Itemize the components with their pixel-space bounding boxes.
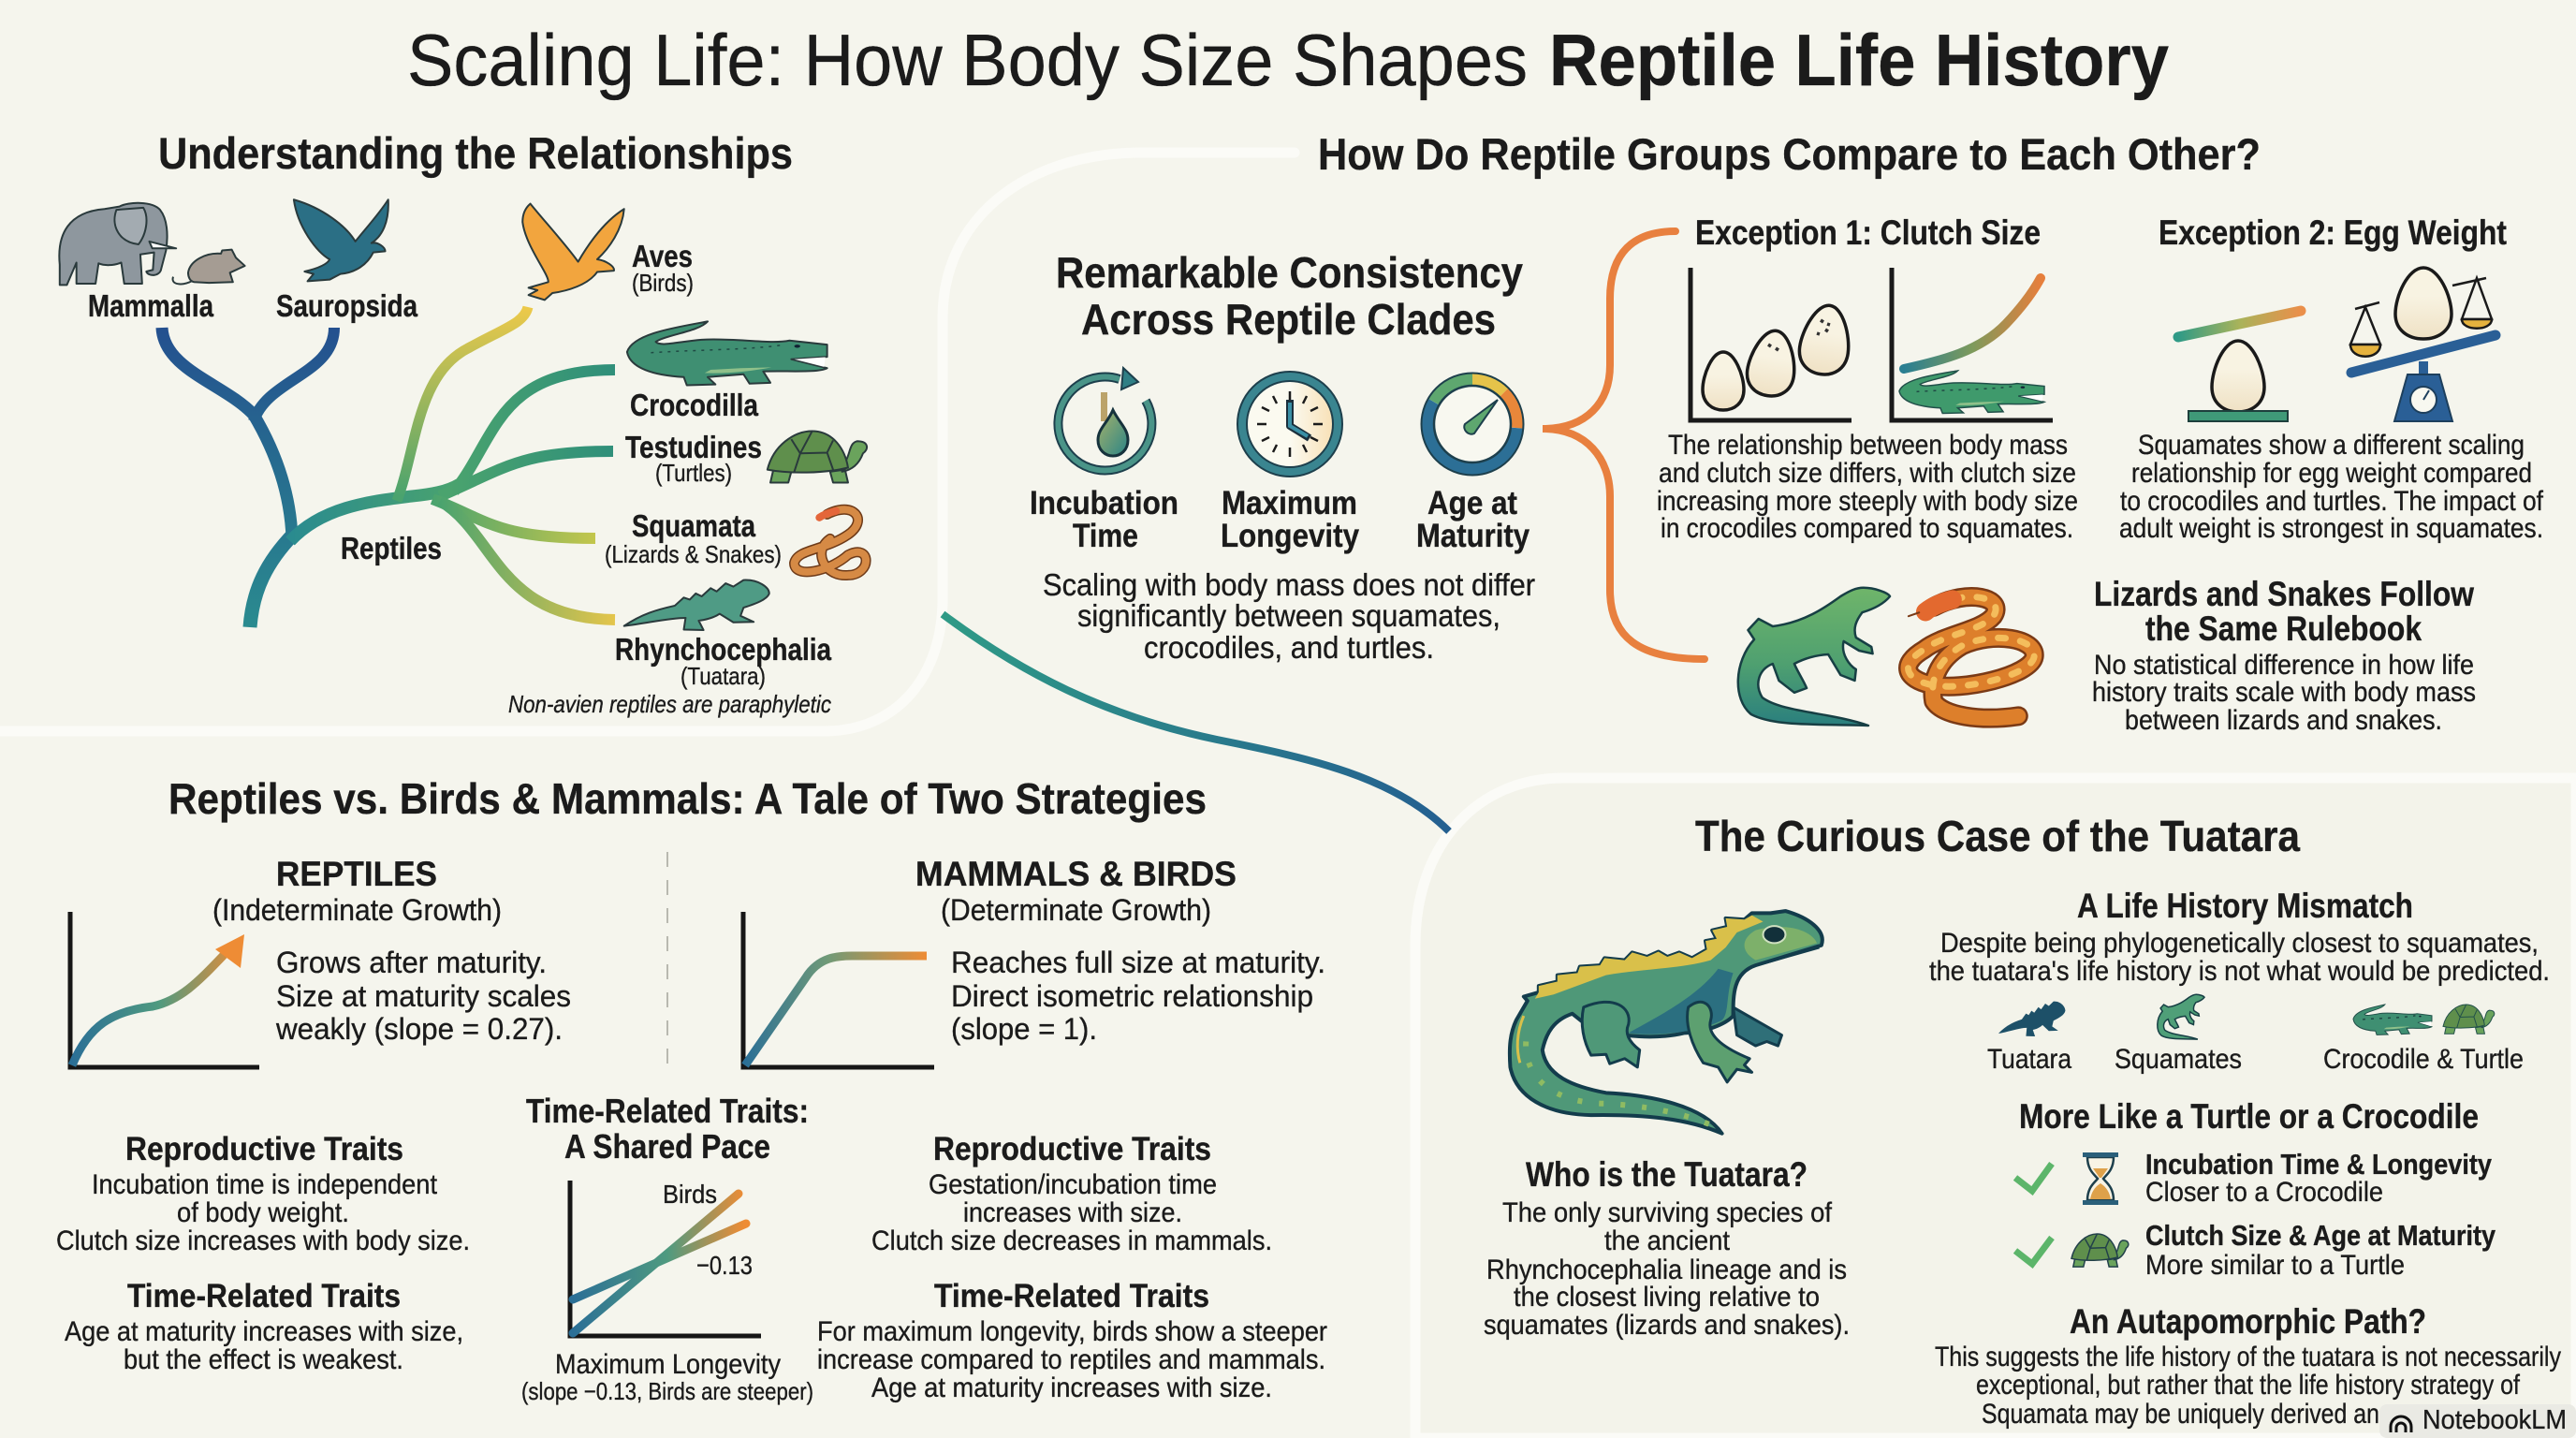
tree labels: (Tuatara) xyxy=(681,662,766,690)
chart: maximum longevity: (slope −0.13, Birds are steeper) xyxy=(521,1377,813,1405)
icon: crocodile xyxy=(627,321,827,385)
icon: egg on stand xyxy=(2178,311,2301,421)
text: Closer to a Crocodile xyxy=(2145,1177,2383,1208)
icon: clock xyxy=(1237,372,1342,477)
text block: life history mismatch xyxy=(1929,887,2550,987)
mammals and birds text: Direct isometric relationship xyxy=(951,979,1313,1013)
right traits xyxy=(817,1131,1327,1403)
tree labels: Sauropsida xyxy=(276,288,418,323)
icon labels: Crocodile & Turtle xyxy=(2323,1044,2524,1075)
subheading: more like a turtle or crocodile: More Like a Turtle or a Crocodile xyxy=(2019,1097,2479,1136)
mammals and birds text: Reaches full size at maturity. xyxy=(951,946,1325,979)
panel: reptiles vs birds and mammals xyxy=(56,774,1327,1405)
right traits: increases with size. xyxy=(963,1197,1182,1228)
divider xyxy=(666,852,668,1065)
head markings xyxy=(1745,927,1817,961)
icon labels: Age at xyxy=(1427,485,1517,521)
heading: Understanding the Relationships xyxy=(158,128,793,178)
right traits: increase compared to reptiles and mammals. xyxy=(817,1344,1325,1375)
heading: Reptiles vs. Birds & Mammals: A Tale of Two Strategies xyxy=(168,774,1207,823)
text block: who is the tuatara: the closest living relative to xyxy=(1514,1282,1820,1313)
text: Incubation Time & Longevity xyxy=(2145,1148,2493,1181)
text: The relationship between body mass xyxy=(1668,430,2068,461)
left traits xyxy=(56,1131,470,1375)
text xyxy=(2092,650,2476,736)
text block: who is the tuatara: squamates (lizards and snakes). xyxy=(1484,1310,1850,1341)
text: increasing more steeply with body size xyxy=(1657,486,2078,517)
right traits: Reproductive Traits xyxy=(933,1131,1211,1167)
text: history traits scale with body mass xyxy=(2092,677,2476,708)
connector curve xyxy=(943,614,1449,831)
text xyxy=(1657,430,2078,544)
panel: curious case of the tuatara xyxy=(1484,812,2576,1438)
right traits: Time-Related Traits xyxy=(934,1278,1209,1314)
subheading: shared pace: A Shared Pace xyxy=(564,1127,770,1166)
far front leg xyxy=(1734,1007,1781,1046)
text xyxy=(2119,430,2544,544)
exception 1: clutch size xyxy=(1657,213,2078,544)
panel outline: relationships xyxy=(0,153,1295,731)
text block: scaling: Scaling with body mass does not differ xyxy=(1043,567,1535,602)
text: Squamates show a different scaling xyxy=(2138,430,2525,461)
mammals and birds text: (slope = 1). xyxy=(951,1012,1097,1046)
chart: eggs xyxy=(1690,268,1854,420)
icon: lizard xyxy=(1738,588,1890,726)
text: and clutch size differs, with clutch size xyxy=(1659,458,2076,489)
icon: turtle xyxy=(2071,1234,2129,1267)
tree labels: Non-avien reptiles are paraphyletic xyxy=(508,690,831,718)
icon: small squamate xyxy=(2158,994,2204,1039)
panel: understanding the relationships xyxy=(59,128,867,718)
chart: maximum longevity xyxy=(521,1180,813,1405)
tree labels: (Lizards & Snakes) xyxy=(605,540,782,568)
text block: scaling: crocodiles, and turtles. xyxy=(1144,630,1434,665)
icon labels: Tuatara xyxy=(1987,1044,2071,1075)
heading: The Curious Case of the Tuatara xyxy=(1695,812,2300,860)
subheading: remarkable consistency xyxy=(1056,248,1523,344)
front leg xyxy=(1688,1002,1752,1082)
chart: maximum longevity: Birds xyxy=(663,1180,717,1209)
icon: tuatara xyxy=(624,580,769,630)
text: between lizards and snakes. xyxy=(2125,705,2442,736)
tree labels xyxy=(88,239,832,718)
row: clutch and maturity xyxy=(2015,1219,2496,1281)
left traits: of body weight. xyxy=(177,1197,349,1228)
reptiles text: Grows after maturity. xyxy=(276,946,547,979)
title: Scaling Life: How Body Size Shapes xyxy=(407,19,1528,101)
reptiles heading: (Indeterminate Growth) xyxy=(212,893,502,927)
watermark: NotebookLM: NotebookLM xyxy=(2422,1405,2567,1435)
text block: who is the tuatara: The only surviving species of xyxy=(1502,1197,1833,1228)
heading: the Same Rulebook xyxy=(2145,609,2422,648)
reptiles text: weakly (slope = 0.27). xyxy=(275,1012,563,1046)
tree labels: (Birds) xyxy=(632,269,694,297)
tree labels: Crocodilla xyxy=(630,388,759,422)
text block: autapomorphic path: An Autapomorphic Path? xyxy=(2070,1302,2426,1341)
icon: check mark xyxy=(2015,1238,2052,1264)
text xyxy=(2145,1148,2493,1208)
text: No statistical difference in how life xyxy=(2094,650,2474,681)
icon labels xyxy=(1030,485,1530,554)
icon row: comparison xyxy=(1987,994,2524,1075)
left traits: Reproductive Traits xyxy=(125,1131,403,1167)
title xyxy=(407,19,2169,101)
text: in crocodiles compared to squamates. xyxy=(1661,513,2073,544)
right traits: Clutch size decreases in mammals. xyxy=(871,1225,1272,1256)
text block: autapomorphic path xyxy=(1935,1302,2561,1430)
tree icons xyxy=(59,199,867,630)
mammals and birds heading: MAMMALS & BIRDS xyxy=(915,855,1237,893)
text block: scaling xyxy=(1043,567,1535,665)
left traits: Clutch size increases with body size. xyxy=(56,1225,470,1256)
text block: autapomorphic path: Squamata may be uniquely derived an xyxy=(1982,1399,2379,1430)
tree labels: Reptiles xyxy=(341,531,442,565)
tree labels: Squamata xyxy=(632,508,756,543)
icon: check mark xyxy=(2015,1164,2052,1191)
text xyxy=(2145,1219,2496,1281)
subheading: shared pace xyxy=(526,1092,809,1166)
reptiles text xyxy=(275,946,571,1046)
row: incubation and longevity xyxy=(2015,1148,2493,1208)
icon labels: Incubation xyxy=(1030,485,1178,521)
left traits: but the effect is weakest. xyxy=(124,1344,403,1375)
icon labels: Squamates xyxy=(2115,1044,2242,1075)
text block: who is the tuatara xyxy=(1484,1155,1850,1341)
chart: crocodile curve xyxy=(1892,268,2053,420)
tail bands xyxy=(1526,1041,1711,1125)
text: Clutch Size & Age at Maturity xyxy=(2145,1219,2496,1252)
mammals and birds heading xyxy=(915,855,1237,927)
icon labels: Time xyxy=(1073,518,1138,554)
text block: who is the tuatara: the ancient xyxy=(1604,1225,1731,1256)
title: Reptile Life History xyxy=(1549,19,2169,101)
throat and belly xyxy=(1629,969,1734,1034)
left traits: Age at maturity increases with size, xyxy=(65,1316,463,1347)
text block: who is the tuatara: Who is the Tuatara? xyxy=(1526,1155,1808,1194)
text block: scaling: significantly between squamates, xyxy=(1077,598,1500,633)
icon labels xyxy=(1987,1044,2524,1075)
chart: indeterminate growth xyxy=(70,912,259,1067)
icon labels: Maturity xyxy=(1416,518,1530,554)
icon: snake xyxy=(795,509,866,576)
hind leg xyxy=(1582,1002,1640,1067)
icon: small crocodile xyxy=(2353,1005,2432,1034)
panel: tuatara background xyxy=(1415,778,2576,1438)
icon: mouse xyxy=(173,250,245,284)
heading: Lizards and Snakes Follow xyxy=(2094,575,2474,613)
heading xyxy=(2094,575,2474,648)
subheading: shared pace: Time-Related Traits: xyxy=(526,1092,809,1130)
text block: who is the tuatara: Rhynchocephalia lineage and is xyxy=(1486,1255,1847,1285)
tree labels: Mammalla xyxy=(88,288,214,323)
chart: maximum longevity: −0.13 xyxy=(696,1251,753,1280)
phylogenetic tree xyxy=(162,307,615,627)
icon: gauge xyxy=(1421,373,1524,476)
right traits: Gestation/incubation time xyxy=(929,1169,1217,1200)
icon: small tuatara xyxy=(1998,1002,2065,1036)
heading: Exception 2: Egg Weight xyxy=(2159,213,2507,252)
panel: how do reptile groups compare xyxy=(1030,129,2544,736)
tree labels: Aves xyxy=(632,239,693,273)
right traits: Age at maturity increases with size. xyxy=(871,1372,1272,1403)
heading: How Do Reptile Groups Compare to Each Other? xyxy=(1318,129,2261,179)
tree labels: Testudines xyxy=(625,430,762,464)
chart: determinate growth xyxy=(743,912,934,1067)
mammals and birds text xyxy=(951,946,1325,1046)
icon: blue bird xyxy=(294,199,388,281)
subheading: remarkable consistency: Remarkable Consistency xyxy=(1056,248,1523,297)
text: More similar to a Turtle xyxy=(2145,1250,2405,1281)
icon: incubation time xyxy=(1058,368,1151,471)
lizards and snakes xyxy=(1738,575,2476,736)
brace xyxy=(1543,231,1705,659)
icon labels: Maximum xyxy=(1222,485,1357,521)
icon: balance scale xyxy=(2350,268,2496,421)
mammals and birds heading: (Determinate Growth) xyxy=(941,893,1211,927)
illustration: tuatara xyxy=(1510,911,1822,1134)
exception 2: egg weight xyxy=(2119,213,2544,544)
chart: maximum longevity: Maximum Longevity xyxy=(555,1349,781,1380)
icon: orange bird xyxy=(522,204,624,300)
watermark: NotebookLM xyxy=(2379,1404,2576,1438)
icon labels: Longevity xyxy=(1221,518,1359,554)
icon: turtle xyxy=(768,431,867,483)
icon: small turtle xyxy=(2443,1005,2495,1034)
body xyxy=(1510,911,1822,1134)
icon: coiled snake xyxy=(1909,597,2034,718)
reptiles text: Size at maturity scales xyxy=(276,979,571,1013)
left traits: Time-Related Traits xyxy=(127,1278,401,1314)
dorsal crest xyxy=(1535,916,1764,999)
icon: hourglass xyxy=(2083,1152,2118,1205)
reptiles heading: REPTILES xyxy=(276,855,437,893)
subheading: remarkable consistency: Across Reptile Clades xyxy=(1081,295,1496,344)
tree labels: (Turtles) xyxy=(655,459,732,487)
reptiles heading xyxy=(212,855,502,927)
left traits: Incubation time is independent xyxy=(92,1169,438,1200)
right traits: For maximum longevity, birds show a steeper xyxy=(817,1316,1327,1347)
tree labels: Rhynchocephalia xyxy=(615,632,832,667)
icon: elephant xyxy=(59,203,176,285)
text block: life history mismatch: A Life History Mismatch xyxy=(2077,887,2413,925)
heading: Exception 1: Clutch Size xyxy=(1695,213,2041,252)
